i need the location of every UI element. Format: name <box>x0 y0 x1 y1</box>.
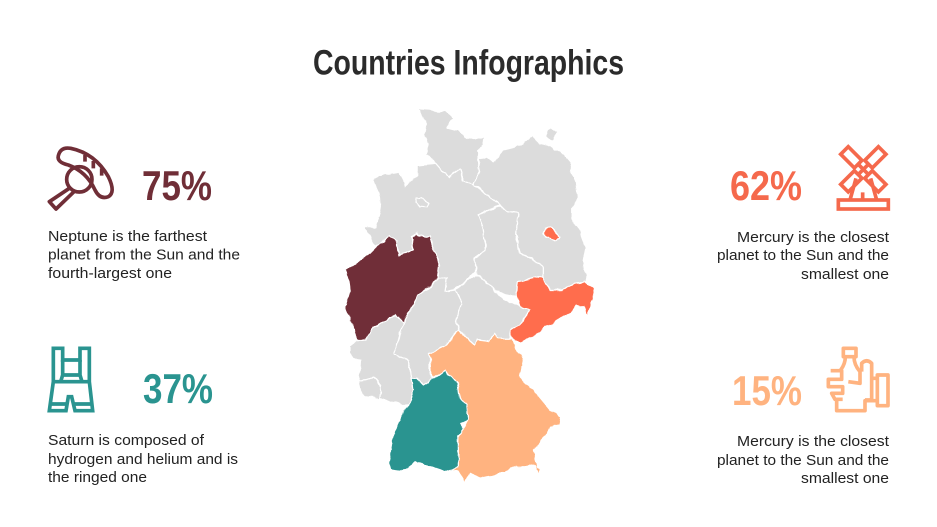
description: planet to the Sun and the <box>717 453 889 469</box>
description: planet from the Sun and the <box>48 248 240 264</box>
icon: hand holding bottle <box>828 348 888 411</box>
region: island Rugen <box>546 128 557 140</box>
region: Schleswig-Holstein <box>419 108 485 185</box>
region: North Rhine-Westphalia <box>345 233 440 340</box>
stat: 62% <box>717 132 901 283</box>
description <box>717 434 889 487</box>
region: Saxony-Anhalt <box>475 206 543 297</box>
region: Thuringia <box>455 275 530 345</box>
region: Saarland <box>358 377 382 398</box>
description: hydrogen and helium and is <box>48 452 238 468</box>
description: Mercury is the closest <box>737 230 889 246</box>
region: Lower Saxony <box>365 163 500 292</box>
region: Bremen <box>416 197 428 207</box>
description: smallest one <box>801 471 889 487</box>
description: planet to the Sun and the <box>717 248 889 264</box>
stat: 37% <box>48 348 238 486</box>
description: Saturn is composed of <box>48 433 205 449</box>
value: 37% <box>143 365 213 412</box>
icon: sausage on fork <box>49 148 112 209</box>
region: north-east states <box>473 135 587 290</box>
map of Germany <box>345 108 594 483</box>
stat: 15% <box>717 348 889 487</box>
icon: overalls <box>49 348 93 411</box>
description: Neptune is the farthest <box>48 229 207 245</box>
description <box>717 230 889 283</box>
stat: 75% <box>48 148 240 282</box>
description <box>48 433 238 486</box>
value: 15% <box>732 367 802 414</box>
region: Hesse <box>393 277 462 385</box>
description: fourth-largest one <box>48 266 172 282</box>
icon: windmill <box>826 132 901 209</box>
value: 75% <box>142 162 212 209</box>
description: Mercury is the closest <box>737 434 889 450</box>
region: Bavaria <box>430 330 562 483</box>
title: Countries Infographics <box>313 44 624 82</box>
region: Rhineland-Palatinate <box>350 315 413 405</box>
region: Baden-Wurttemberg <box>389 370 468 472</box>
value: 62% <box>730 162 802 209</box>
region: Berlin <box>543 227 560 240</box>
region: Saxony <box>510 277 594 343</box>
description: the ringed one <box>48 470 147 486</box>
description <box>48 229 240 282</box>
description: smallest one <box>801 267 889 283</box>
